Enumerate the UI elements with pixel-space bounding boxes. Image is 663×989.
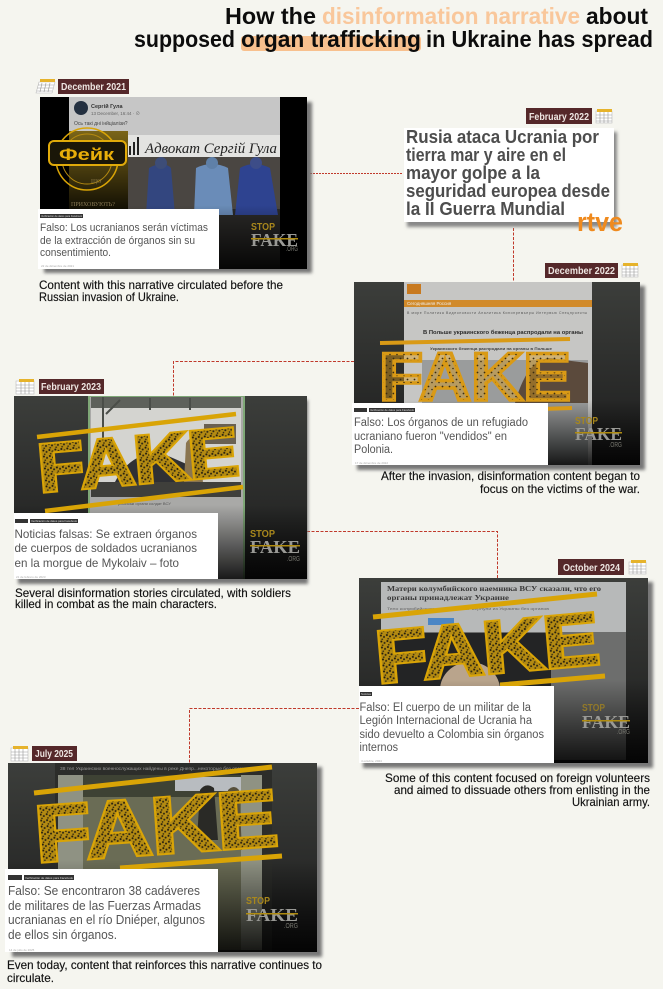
logo: StopFake: FAKE [582,712,630,732]
caption card: ucraniano fueron "vendidos" en [354,431,507,443]
icon: calendar [629,560,646,574]
caption: February 2023: killed in combat as the main characters. [15,597,217,611]
drop shadow [363,582,653,768]
logo: StopFake: .ORG [609,442,622,449]
logo: StopFake [250,529,300,563]
logo: StopFake: FAKE [246,905,298,925]
icon: calendar [16,379,34,394]
headline card [404,127,614,222]
caption card: Falso: Los ucranianos serán víctimas [40,222,208,234]
date tag: July 2025 [32,746,77,761]
title: organ trafficking [241,26,421,52]
logo: StopFake: .ORG [617,729,630,736]
caption card: Noticias falsas: Se extraen órganos [14,527,197,541]
title: How the [225,3,316,29]
caption card: Falso: El cuerpo de un militar de la [360,702,532,714]
logo: rtve: rtve [577,207,623,237]
caption: December 2021 [39,278,283,304]
logo: StopFake [582,703,630,736]
date tag: February 2023: February 2023 [41,381,101,393]
screenshot background: В мире Политика Видеоновости Аналитика Кинопремьеры Интервью Спецпроекты [407,311,587,315]
caption: February 2023 [15,586,291,611]
caption card: de cuerpos de soldados ucranianos [14,541,197,555]
screenshot background: органы принадлежат Украине [387,593,510,602]
caption: October 2024: Ukrainian army. [572,795,650,809]
title [134,3,653,52]
screenshot background: В Польше украинского беженца распродали на органы [423,329,583,336]
headline card: Rusia ataca Ucrania por [406,127,599,147]
screenshot background [359,578,648,763]
stamp: Фейк: ПРИХОВУЮТЬ? [71,202,115,208]
stamp: Фейк [49,128,126,208]
logo: StopFake: STOP [246,896,270,907]
screenshot background [8,763,317,952]
panel: December 2021 [36,79,312,304]
panel: February 2022 [404,108,623,237]
stamp: FAKE: FAKE [35,414,242,507]
screenshot background: Ось такі дні інйціалізи? [74,120,128,127]
caption card: Verificación de datos para Facebook [31,519,77,523]
caption card [352,403,548,465]
caption card [14,513,218,579]
headline card: mayor golpe a la [406,163,541,183]
panel: December 2022 [352,263,645,496]
caption card: 4 octubre, 2024 [361,759,382,763]
connector: December 2022 to February 2023 [174,362,354,396]
caption card: Legión Internacional de Ucrania ha [360,715,533,727]
logo: StopFake: .ORG [286,246,298,253]
icon: calendar [36,79,55,93]
title: in Ukraine has spread [426,26,653,52]
connector: February 2022 to December 2022 [512,228,514,282]
screenshot background: Матери колумбийского наемника ВСУ сказали, что его [387,584,601,593]
logo: StopFake: FAKE [250,537,300,557]
caption card: Falso: Los órganos de un refugiado [354,417,528,429]
date tag: February 2022: February 2022 [529,111,589,123]
caption: October 2024: Some of this content focused on foreign volunteers [385,771,650,785]
date tag: October 2024 [558,559,624,575]
screenshot background: 13 December, 16:44 · ⊘ [91,111,140,116]
stamp: FAKE: FAKE [32,773,281,879]
logo: StopFake [246,896,298,930]
caption card: de la extracción de órganos sin su [40,235,195,247]
date tag: December 2021 [58,79,129,94]
caption card [38,209,219,269]
caption: February 2023: Several disinformation stories circulated, with soldiers [15,586,291,600]
drop shadow [44,102,312,273]
date tag: February 2022 [526,108,592,124]
caption: December 2022: After the invasion, disinformation content began to [381,469,640,483]
caption: December 2021: Content with this narrative circulated before the [39,278,283,292]
stamp: FAKE: FAKE [372,597,603,699]
caption card: Polonia. [354,444,393,456]
caption card: 14 de julio de 2025 [9,948,35,952]
logo: StopFake [251,222,298,253]
screenshot background: російські органи солдат ВСУ [118,501,171,506]
panel: October 2024 [359,559,653,809]
stamp: Фейк: Фейк [59,145,115,164]
headline card: la II Guerra Mundial [406,199,565,219]
stamp: Фейк: ЩО [91,179,102,185]
drop shadow [18,400,308,584]
panel: February 2023 [14,379,308,611]
screenshot background: Адвокат Сергій Гула [144,141,277,157]
logo: StopFake: FAKE [251,230,298,250]
caption: December 2022 [381,469,640,496]
logo: StopFake: .ORG [287,556,300,563]
title: disinformation narrative [322,3,580,29]
drop shadow [407,132,617,227]
logo: StopFake: STOP [250,529,275,540]
title: supposed [134,26,235,52]
caption card: Verificación de datos para Facebook [41,214,82,218]
headline card: seguridad europea desde [406,181,610,201]
screenshot background: 38 тел Украинских военнослужащих найдены в реке Днепр...некоторые без органов [60,766,251,771]
icon: calendar [622,263,638,277]
caption: July 2025: Even today, content that reinforces this narrative continues to [7,958,322,972]
date tag: December 2021: December 2021 [61,81,126,93]
caption card: 21 de febrero de 2023 [16,575,46,579]
date tag: July 2025: July 2025 [35,748,73,760]
caption card: internos [360,742,398,754]
date tag: December 2022: December 2022 [548,265,615,277]
date tag: October 2024: October 2024 [563,562,620,574]
stamp: FAKE: FAKE [379,339,571,415]
logo: StopFake: STOP [251,222,275,233]
screenshot background [354,282,640,465]
caption card: en la morgue de Mykolaiv – foto [14,556,179,570]
screenshot background: Сергій Гула [91,103,124,110]
caption: December 2021: Russian invasion of Ukraine. [39,290,179,304]
screenshot background: Украинского беженца распродали на органы в Польше [430,346,553,351]
drop shadow [357,286,645,470]
screenshot background [14,396,307,579]
caption card: consentimiento. [40,247,111,259]
connector: December 2021 to February 2022 [310,172,403,174]
headline card: tierra mar y aire en el [406,145,566,165]
logo: StopFake [575,416,622,449]
caption card: de militares de las Fuerzas Armadas [8,899,201,913]
caption card: Verificación de datos para Facebook [370,408,414,412]
caption card: Verificación de datos para Facebook [25,876,73,880]
caption: October 2024 [385,771,650,809]
connector: February 2023 to October 2024 [307,532,498,578]
caption card: sido devuelto a Colombia sin órganos [360,729,544,741]
logo: StopFake: .ORG [284,923,298,930]
caption card: ucranianas en el río Dniéper, algunos [8,913,205,927]
logo: StopFake: STOP [575,416,598,427]
logo: StopFake: FAKE [575,424,622,444]
drop shadow [12,767,322,957]
icon: calendar [596,109,612,123]
caption card [359,686,554,763]
caption card: Falso: Se encontraron 38 cadáveres [8,884,200,898]
caption card [5,869,218,952]
logo: StopFake: STOP [582,703,605,714]
caption card: Noticias [361,692,371,696]
caption: July 2025: circulate. [7,971,54,985]
panel: July 2025 [5,746,322,985]
screenshot background: Сегодняшняя Россия [407,301,452,306]
caption card: 17 de diciembre de 2022 [355,461,388,465]
connector: October 2024 to July 2025 [190,708,359,763]
caption: July 2025 [7,958,322,985]
caption: October 2024: and aimed to dissuade others from enlisting in the [394,783,650,797]
screenshot background [40,97,307,269]
icon: calendar [11,746,28,761]
caption card: de ellos sin órganos. [8,928,117,942]
caption: December 2022: focus on the victims of the war. [480,482,640,496]
screenshot background: Тело колумбийского наемника ВСУ вернули из Украины без органов [387,606,549,611]
title: about [586,3,648,29]
caption card: 22 de diciembre de 2021 [41,264,74,268]
